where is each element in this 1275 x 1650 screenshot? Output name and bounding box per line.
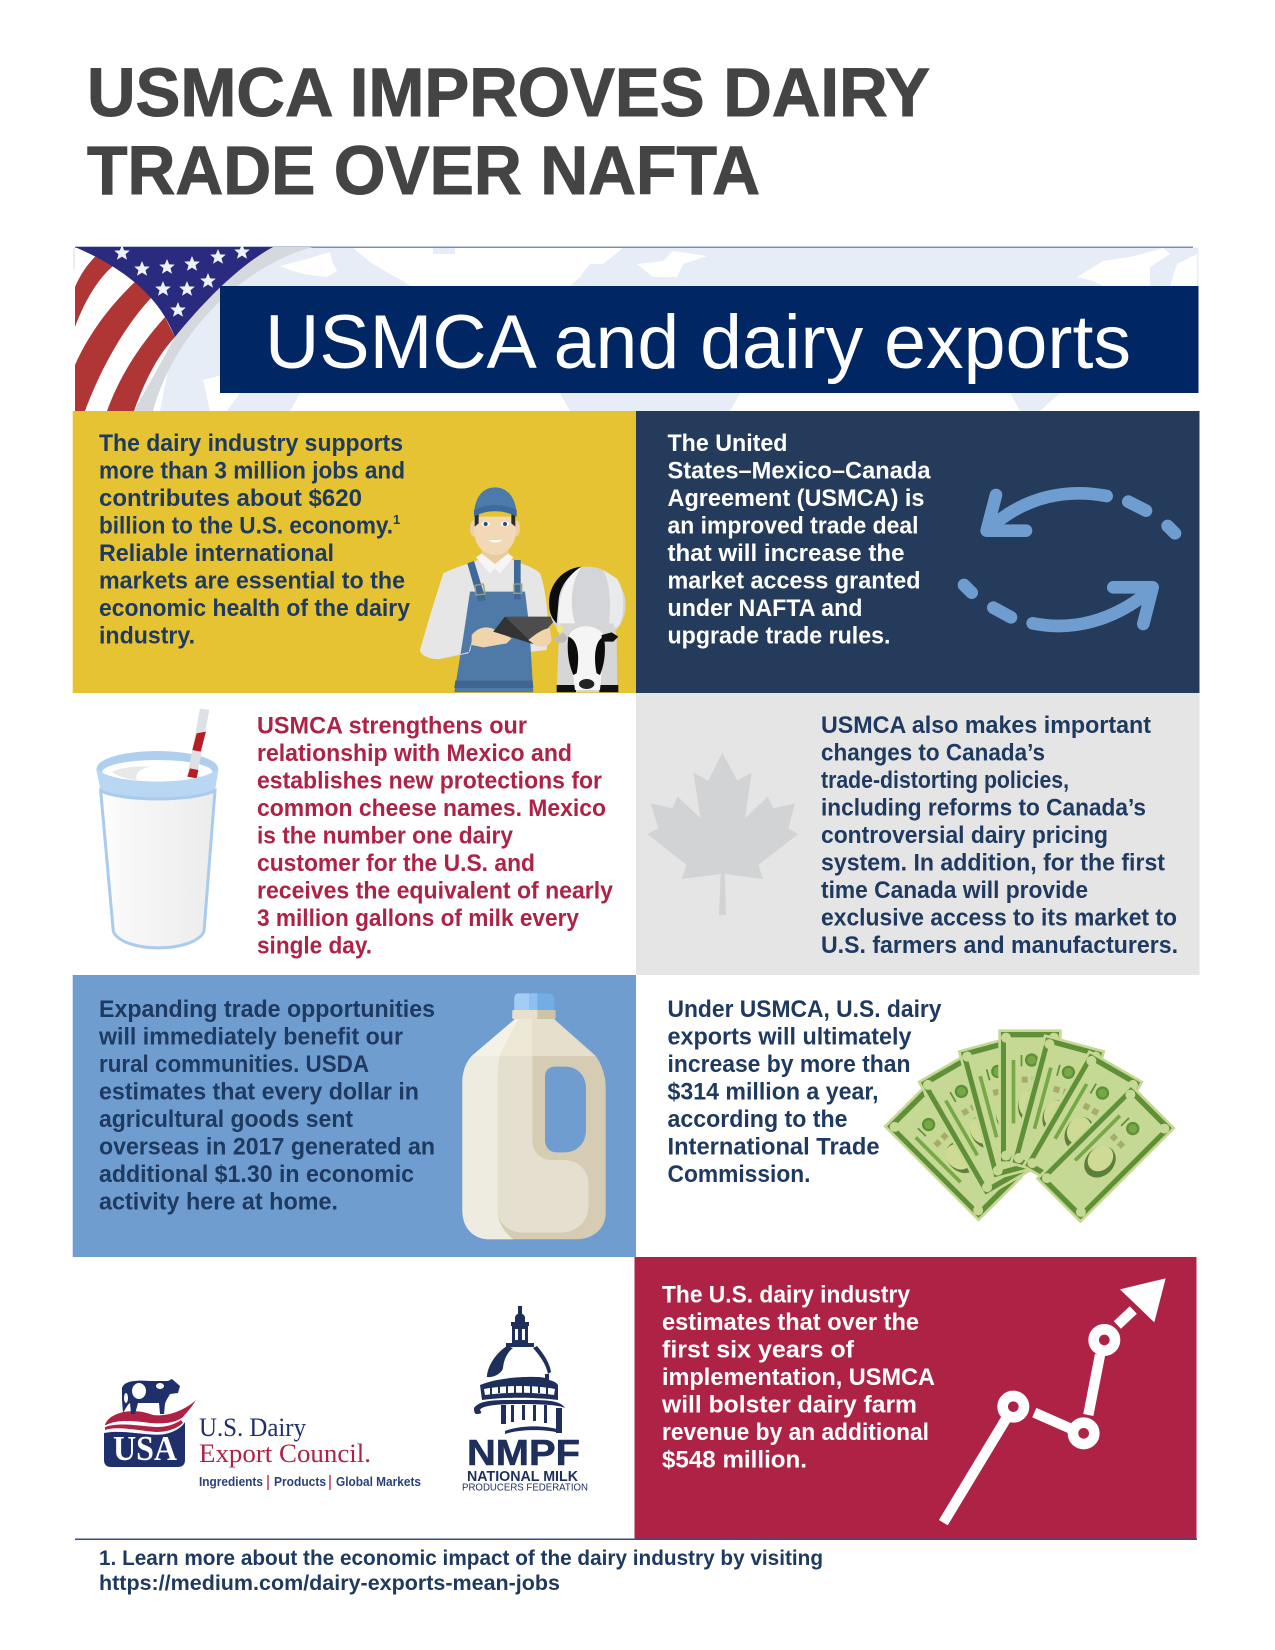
icon: USA badge with cow: USA — [113, 1429, 178, 1468]
text: USMCA trade deal: Agreement (USMCA) is — [668, 485, 924, 512]
panel: Canada — [636, 693, 1200, 975]
text: exports increase: International Trade — [668, 1134, 880, 1160]
icon: rising line chart arrow — [943, 1278, 1166, 1523]
text: USMCA trade deal: upgrade trade rules. — [668, 622, 890, 650]
text: USMCA trade deal: an improved trade deal — [668, 512, 918, 540]
text: farm revenue: implementation, USMCA — [662, 1364, 935, 1391]
panel: dairy industry jobs — [73, 411, 636, 693]
text: exports increase: increase by more than — [668, 1051, 910, 1078]
text: farm revenue — [661, 1282, 935, 1474]
logo: NMPF: NATIONAL MILK — [467, 1469, 579, 1485]
icon: fan of dollar bills — [883, 1029, 1176, 1223]
title: USMCA IMPROVES DAIRY — [87, 54, 930, 131]
text: Mexico — [257, 712, 613, 960]
text: farm revenue: will bolster dairy farm — [661, 1392, 917, 1418]
title: TRADE OVER NAFTA — [87, 132, 760, 209]
text: dairy industry jobs: markets are essential to the — [99, 568, 405, 594]
panel: USMCA trade deal — [636, 411, 1200, 693]
text: rural communities: overseas in 2017 generated an — [99, 1134, 435, 1160]
text: exports increase — [668, 996, 942, 1188]
text: exports increase: exports will ultimately — [668, 1024, 912, 1050]
text: USMCA trade deal — [668, 430, 931, 650]
panel: rural communities — [73, 975, 636, 1257]
text: rural communities: additional $1.30 in economic — [99, 1161, 414, 1188]
icon: glass of milk — [96, 709, 219, 948]
text: Mexico: USMCA strengthens our — [257, 712, 527, 740]
logo: NMPF: PRODUCERS FEDERATION — [462, 1482, 588, 1494]
text: Mexico: establishes new protections for — [257, 768, 602, 794]
text: dairy industry jobs: industry. — [99, 622, 195, 650]
text: Canada: U.S. farmers and manufacturers. — [821, 932, 1178, 959]
logo: U.S. Dairy Export Council: Ingredients — [199, 1474, 263, 1489]
text: Canada — [821, 712, 1178, 959]
logo: U.S. Dairy Export Council: Export Council. — [199, 1439, 371, 1468]
text: farm revenue: estimates that over the — [662, 1309, 919, 1336]
text: farm revenue: revenue by an additional — [662, 1419, 929, 1446]
panel: dollar increase — [636, 975, 1200, 1257]
world map background — [73, 248, 1198, 411]
text: dairy industry jobs: The dairy industry supports — [99, 430, 403, 457]
text: USMCA trade deal: The United — [668, 430, 788, 457]
footnote — [99, 1547, 823, 1595]
text: exports increase: Under USMCA, U.S. dairy — [668, 996, 942, 1023]
text: rural communities: Expanding trade opportunities — [99, 996, 435, 1023]
text: rural communities: agricultural goods sent — [99, 1106, 353, 1133]
panel: Mexico — [73, 693, 636, 975]
logo: NMPF: NMPF — [467, 1432, 580, 1473]
banner: USMCA and dairy exports — [73, 244, 1198, 411]
text: Mexico: common cheese names. Mexico — [257, 795, 606, 822]
text: USMCA trade deal: market access granted — [668, 568, 920, 594]
text: exports increase: $314 million a year, — [668, 1078, 878, 1106]
text: Mexico: 3 million gallons of milk every — [257, 905, 579, 932]
text: farm revenue: $548 million. — [662, 1446, 807, 1474]
text: dairy industry jobs: more than 3 million jobs and — [99, 458, 405, 484]
text: Canada: USMCA also makes important — [821, 712, 1151, 739]
text: dairy industry jobs: 1 — [393, 512, 400, 527]
footnote: https://medium.com/dairy-exports-mean-jobs — [99, 1572, 560, 1595]
text: Canada: system. In addition, for the first — [821, 850, 1165, 876]
logo: U.S. Dairy Export Council: U.S. Dairy — [199, 1413, 306, 1442]
icon: farmer with cow — [420, 487, 626, 692]
icon: flag — [75, 244, 313, 411]
text: USMCA trade deal: States–Mexico–Canada — [668, 458, 931, 484]
text: USMCA trade deal: that will increase the — [668, 540, 904, 567]
text: rural communities: rural communities. USDA — [99, 1051, 369, 1078]
text: Canada: changes to Canada’s — [821, 740, 1045, 766]
text: Canada: including reforms to Canada’s — [821, 794, 1146, 822]
logo: U.S. Dairy Export Council: Global Markets — [336, 1474, 421, 1489]
icon: maple leaf — [647, 753, 798, 915]
text: dairy industry jobs: Reliable international — [99, 540, 334, 567]
text: Mexico: is the number one dairy — [257, 822, 513, 850]
text: dairy industry jobs: economic health of the dairy — [99, 595, 410, 622]
icon: capitol dome — [474, 1306, 565, 1434]
text: Mexico: receives the equivalent of nearly — [257, 878, 613, 904]
text: dairy industry jobs: contributes about $620 — [99, 485, 362, 512]
text: dairy industry jobs — [99, 430, 410, 650]
text: Canada: trade-distorting policies, — [821, 767, 1069, 794]
text: USMCA trade deal: under NAFTA and — [668, 595, 862, 622]
text: rural communities: estimates that every dollar in — [99, 1078, 419, 1106]
text: Canada: time Canada will provide — [821, 877, 1088, 904]
banner: USMCA and dairy exports: USMCA and dairy exports — [265, 300, 1131, 385]
logo: NMPF — [462, 1306, 588, 1494]
text: dairy industry jobs: billion to the U.S. economy. — [99, 512, 393, 540]
icon: circular trade arrows — [964, 493, 1175, 626]
text: Mexico: relationship with Mexico and — [257, 740, 572, 767]
footnote: 1. Learn more about the economic impact of the dairy industry by visiting — [99, 1547, 823, 1570]
logo: U.S. Dairy Export Council: Products — [274, 1474, 326, 1489]
text: exports increase: Commission. — [668, 1161, 810, 1188]
text: Canada: exclusive access to its market to — [821, 904, 1177, 932]
text: exports increase: according to the — [668, 1106, 848, 1133]
icon: USA badge with cow — [104, 1379, 196, 1468]
text: farm revenue: first six years of — [662, 1336, 855, 1364]
text: Mexico: single day. — [257, 932, 372, 960]
icon: milk jug — [462, 993, 606, 1239]
text: rural communities — [98, 996, 435, 1216]
text: rural communities: will immediately benefit our — [98, 1024, 403, 1050]
title — [87, 54, 930, 209]
text: rural communities: activity here at home. — [99, 1188, 338, 1216]
logo: U.S. Dairy Export Council — [104, 1379, 421, 1490]
text: Mexico: customer for the U.S. and — [257, 850, 535, 877]
text: farm revenue: The U.S. dairy industry — [662, 1282, 910, 1308]
text: Canada: controversial dairy pricing — [821, 822, 1108, 849]
panel: farm revenue — [634, 1257, 1196, 1539]
